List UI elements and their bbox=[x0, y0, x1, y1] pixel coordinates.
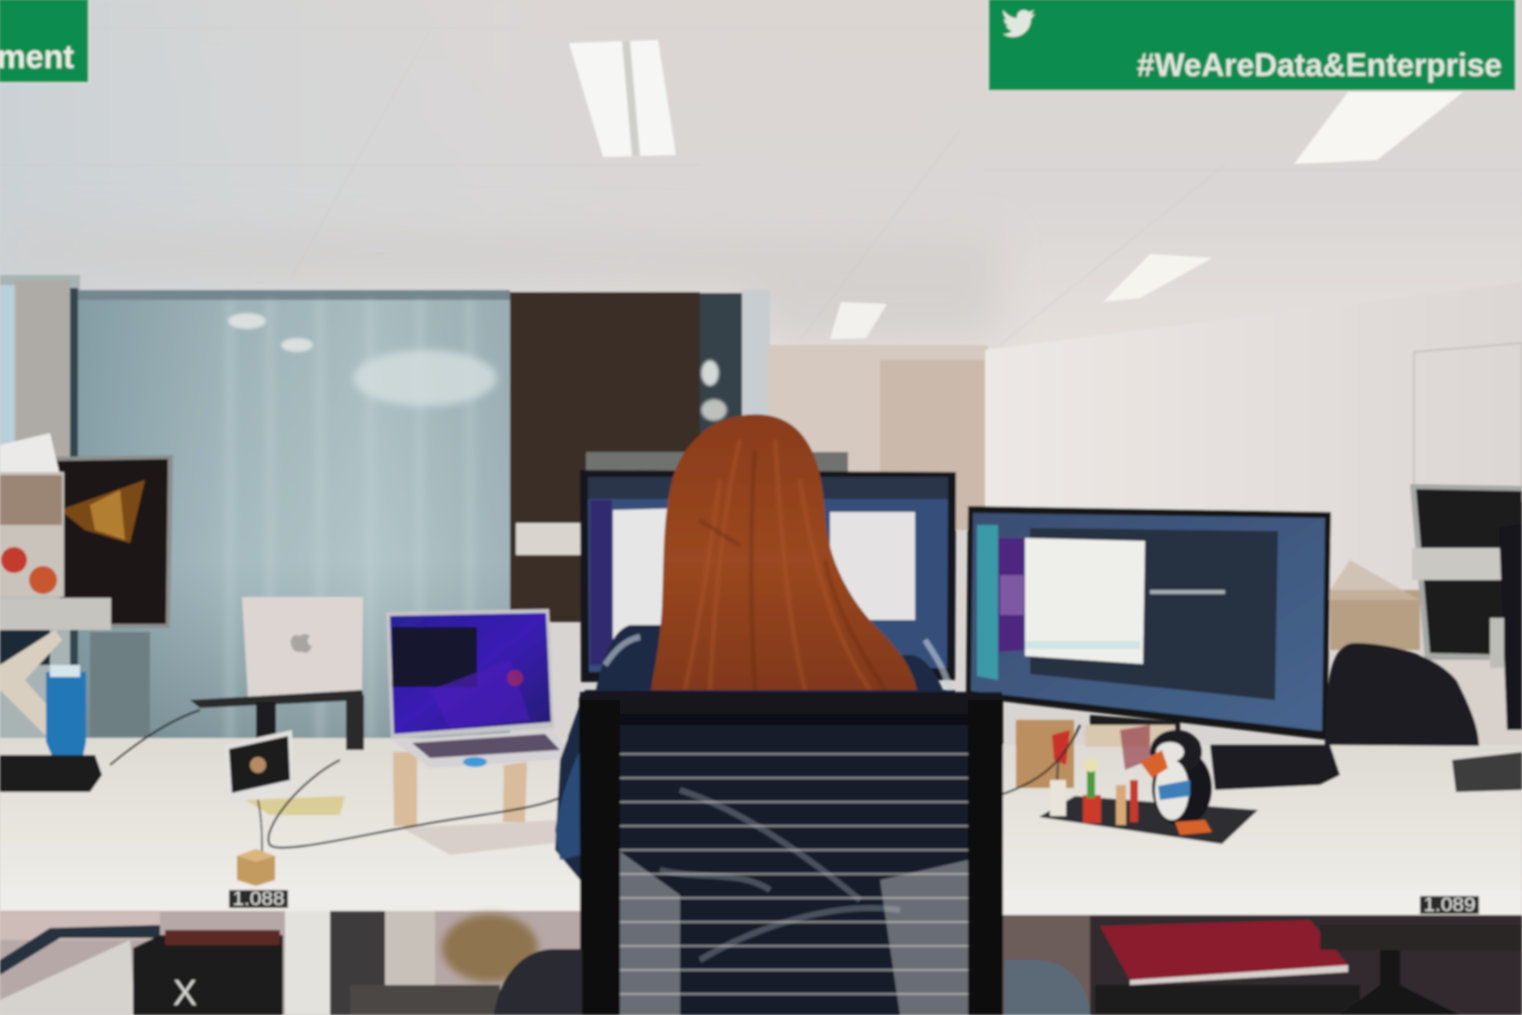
woman's shoulders bbox=[595, 625, 952, 725]
desk surface bbox=[0, 738, 1522, 915]
icon: twitter bird bbox=[1003, 10, 1035, 37]
desk objects left bbox=[110, 710, 1479, 916]
back wall and curtains bbox=[0, 275, 1522, 750]
sign: left green bbox=[0, 0, 89, 83]
right monitor with code bbox=[966, 506, 1331, 740]
sign: twitter hashtag: #WeAreData&Enterprise bbox=[1137, 47, 1502, 83]
chair armrests bbox=[494, 949, 1090, 1015]
yellow paper bbox=[245, 796, 345, 815]
office chair bbox=[579, 691, 1003, 1015]
silver laptop on stand bbox=[190, 597, 364, 750]
camera box: X bbox=[173, 972, 197, 1013]
red folders bbox=[1095, 920, 1360, 1015]
ceiling lights bbox=[569, 40, 1463, 339]
desk label 1.088: 1.088 bbox=[232, 889, 284, 910]
cables bbox=[110, 710, 565, 848]
desk label 1.089: 1.089 bbox=[1424, 895, 1476, 916]
floor and under desk bbox=[0, 911, 1522, 1015]
centre monitor behind the woman bbox=[516, 452, 956, 682]
camera box bbox=[133, 930, 283, 1015]
right background monitors bbox=[1210, 484, 1522, 792]
long red hair bbox=[648, 414, 918, 706]
left monitor with shelf bbox=[0, 433, 173, 792]
monitor stand bbox=[1085, 725, 1175, 770]
wooden cube bbox=[237, 849, 275, 886]
desk cable right bbox=[1000, 725, 1080, 795]
sign: twitter hashtag bbox=[988, 0, 1516, 91]
purple-screen laptop bbox=[386, 609, 578, 855]
icon: penguin plush bbox=[1140, 730, 1212, 835]
ceiling bbox=[0, 0, 1522, 350]
woman's patterned top bbox=[555, 690, 955, 880]
photo card bbox=[224, 730, 294, 803]
toys and penguin bbox=[1016, 720, 1258, 844]
